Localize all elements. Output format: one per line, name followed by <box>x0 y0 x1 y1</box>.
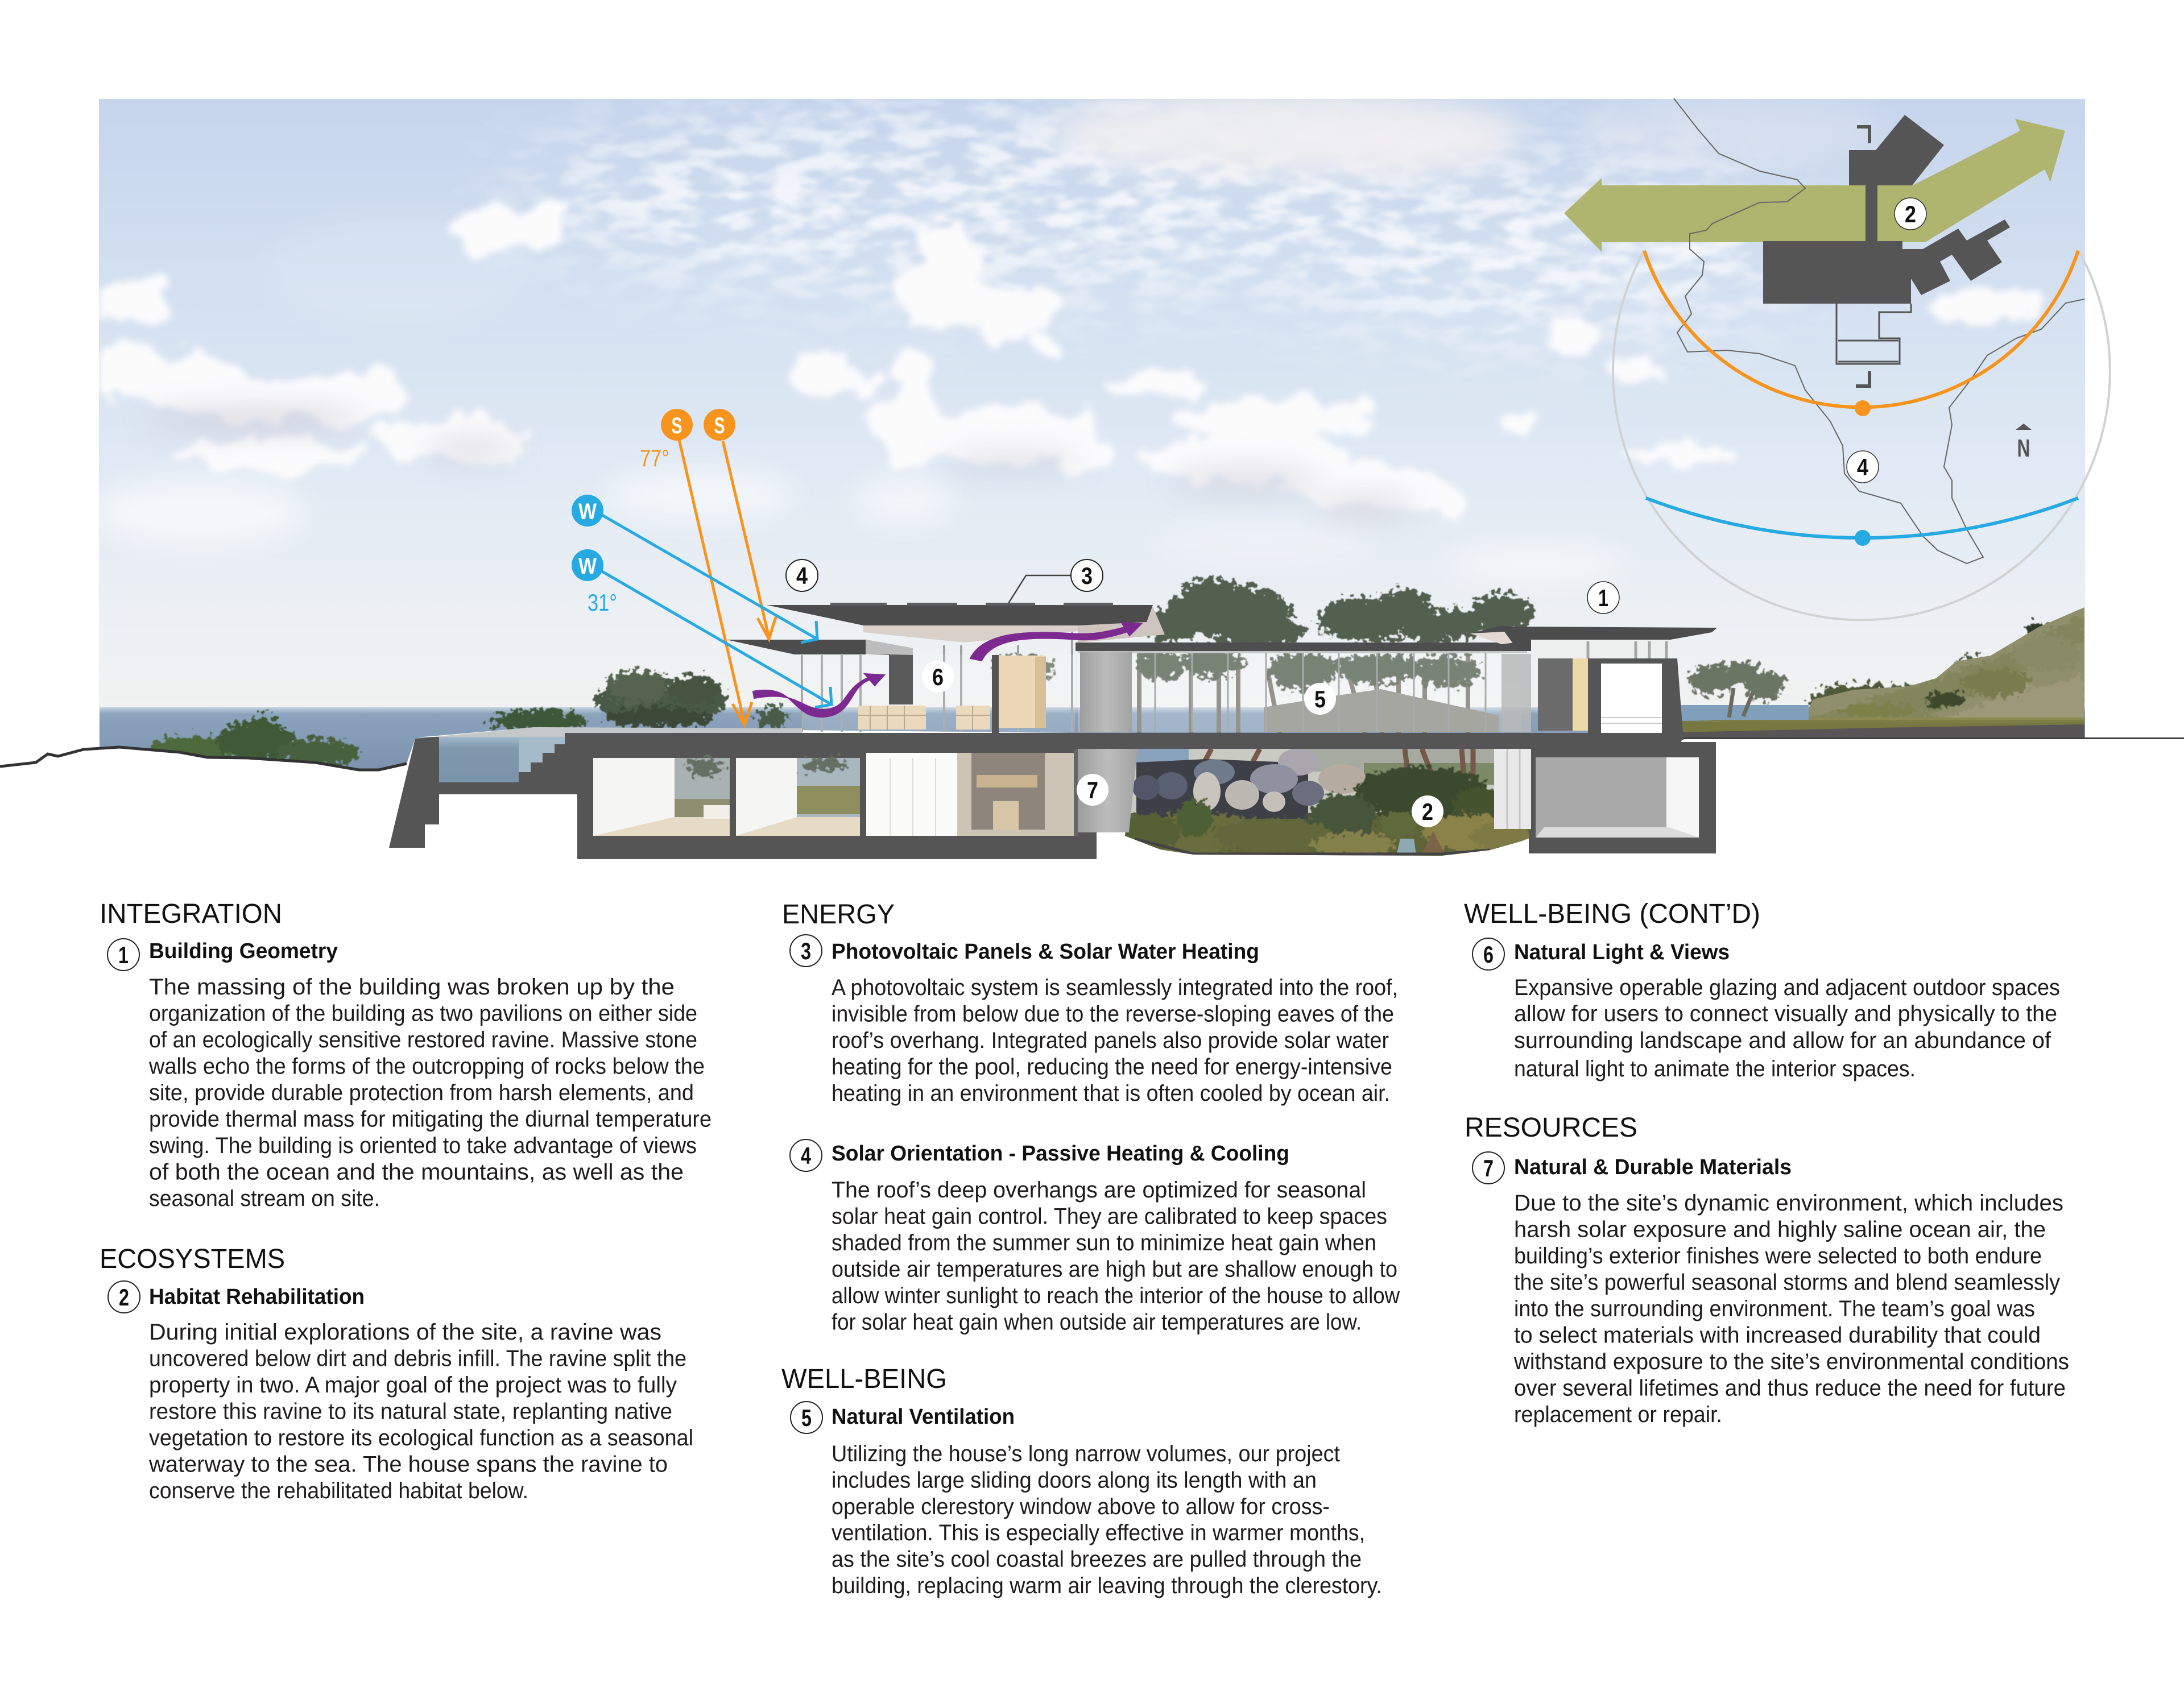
text block: natural light: Expansive operable glazing and adjacent outdoor spaces <box>1514 975 2060 1000</box>
text block: photovoltaic panels: invisible from below due to the reverse-sloping eaves of the <box>832 1002 1394 1027</box>
panel: main roof with photovoltaic panels <box>726 603 1531 654</box>
callout: marker 4 on section: 4 <box>796 562 808 589</box>
text block: photovoltaic panels: heating for the pool, reducing the need for energy-intensive <box>832 1054 1392 1079</box>
text block: habitat rehabilitation: property in two. A major goal of the project was to fully <box>149 1373 677 1398</box>
text block: natural and durable materials: over several lifetimes and thus reduce the need for future <box>1514 1376 2066 1401</box>
text block: habitat rehabilitation: restore this ravine to its natural state, replanting native <box>149 1399 672 1424</box>
pool outline <box>1836 304 1911 364</box>
heading: well-being continued: WELL-BEING (CONT’D) <box>1464 899 1760 929</box>
text block: building geometry: site, provide durable protection from harsh elements, and <box>149 1080 694 1105</box>
text block: solar orientation: allow winter sunlight to reach the interior of the house to allow <box>832 1283 1400 1308</box>
icon: winter sun marker W: W <box>578 499 597 524</box>
icon: summer sun marker S <box>704 409 735 441</box>
text block: habitat rehabilitation: During initial explorations of the site, a ravine was <box>149 1320 661 1345</box>
label: winter sun angle: 31° <box>588 589 617 616</box>
text block: natural and durable materials: harsh solar exposure and highly saline ocean air, the <box>1514 1217 2046 1242</box>
panel: right pavilion upper level <box>1470 626 1717 740</box>
icon: number 4: 4 <box>801 1142 811 1169</box>
text block: natural ventilation: building, replacing warm air leaving through the clerestory. <box>832 1573 1382 1598</box>
panel: right pavilion lower level <box>1529 733 1716 853</box>
text block: solar orientation: solar heat gain control. They are calibrated to keep spaces <box>832 1204 1387 1229</box>
icon: number 2: 2 <box>119 1284 129 1311</box>
panel: ocean band <box>100 707 2085 773</box>
summer sun path <box>1644 251 2078 416</box>
callout: leader line and marker 3: 3 <box>1081 562 1093 589</box>
text block: natural ventilation: Utilizing the house’s long narrow volumes, our project <box>832 1441 1340 1466</box>
green view arrow right <box>1877 119 2065 242</box>
callout: marker 1 on section: 1 <box>1598 585 1608 611</box>
text block: natural ventilation: includes large sliding doors along its length with an <box>832 1468 1317 1493</box>
panel: restored ravine with rocks and planting <box>1118 748 1536 859</box>
north arrow <box>2016 424 2032 462</box>
text block: natural and durable materials: the site’s powerful seasonal storms and blend seamlessly <box>1514 1270 2060 1295</box>
building footprint <box>1763 115 2010 304</box>
panel: pool and retaining wall <box>389 727 802 848</box>
text block: solar orientation: The roof’s deep overhangs are optimized for seasonal <box>832 1178 1366 1203</box>
text block: solar orientation <box>832 1178 1400 1335</box>
subheading: building geometry: Building Geometry <box>149 939 338 963</box>
text block: photovoltaic panels: heating in an environment that is often cooled by ocean air. <box>832 1081 1390 1106</box>
site boundary contour <box>1674 98 2084 563</box>
callout: marker 2 on section: 2 <box>1422 798 1433 825</box>
text block: natural ventilation: ventilation. This is especially effective in warmer months, <box>832 1520 1365 1545</box>
panel: ground below terrain line <box>0 727 2184 910</box>
icon: number 1 <box>107 939 139 971</box>
text block: natural light: surrounding landscape and allow for an abundance of <box>1514 1028 2051 1053</box>
callout: marker 7 on section <box>1077 774 1108 806</box>
text block: building geometry: of an ecologically sensitive restored ravine. Massive stone <box>149 1027 697 1052</box>
icon: number 3: 3 <box>801 938 811 964</box>
text block: building geometry: swing. The building is oriented to take advantage of views <box>149 1133 697 1158</box>
heading: ecosystems: ECOSYSTEMS <box>100 1244 285 1274</box>
icon: number 2 <box>108 1281 140 1313</box>
text block: natural and durable materials: into the surrounding environment. The team’s goal was <box>1514 1296 2035 1321</box>
callout: leader line and marker 3 <box>1008 559 1103 603</box>
text block: building geometry: seasonal stream on site. <box>149 1186 380 1211</box>
text column: well-being continued and resources <box>1464 899 2069 1427</box>
panel: sky background with clouds <box>91 94 2085 741</box>
subheading: natural and durable materials: Natural & Durable Materials <box>1514 1155 1792 1179</box>
subheading: solar orientation: Solar Orientation - Passive Heating & Cooling <box>832 1142 1289 1166</box>
marker 4 on plan <box>1847 451 1879 483</box>
text column: integration and ecosystems <box>100 899 712 1503</box>
text block: habitat rehabilitation <box>148 1320 693 1503</box>
text block: natural and durable materials <box>1513 1191 2069 1427</box>
subheading: habitat rehabilitation: Habitat Rehabilitation <box>149 1285 365 1309</box>
text column: energy and well-being <box>781 900 1400 1598</box>
callout: marker 4 on section <box>786 559 818 591</box>
marker 4 on plan: 4 <box>1857 454 1869 480</box>
text block: building geometry: organization of the building as two pavilions on either side <box>149 1001 697 1026</box>
panel: lower floor rooms <box>565 733 1586 859</box>
icon: number 6 <box>1472 938 1504 970</box>
subheading: natural light: Natural Light & Views <box>1514 940 1730 964</box>
callout: marker 5 on section: 5 <box>1314 686 1326 712</box>
icon: summer sun marker S <box>661 409 693 441</box>
arrow: winter sun rays <box>601 515 832 707</box>
icon: number 5 <box>791 1402 822 1433</box>
text block: photovoltaic panels: A photovoltaic system is seamlessly integrated into the roof, <box>832 975 1398 1000</box>
icon: summer sun marker S: S <box>714 413 725 438</box>
icon: number 7: 7 <box>1483 1155 1494 1182</box>
heading: energy: ENERGY <box>782 900 895 930</box>
text block: photovoltaic panels: roof’s overhang. Integrated panels also provide solar water <box>832 1028 1389 1053</box>
text block: building geometry: of both the ocean and the mountains, as well as the <box>149 1160 684 1185</box>
icon: winter sun marker W: W <box>578 554 597 579</box>
north arrow: N <box>2017 434 2030 462</box>
callout: marker 1 on section <box>1587 582 1619 614</box>
panel: background trees above the roofline <box>992 578 1533 733</box>
heading: well-being: WELL-BEING <box>781 1364 947 1394</box>
marker 2 on plan: 2 <box>1905 201 1916 227</box>
icon: cypress tree right of house <box>1689 662 1785 718</box>
section cut marks <box>1856 127 1869 386</box>
sun path circle <box>1613 251 2110 620</box>
callout: marker 6 on section: 6 <box>932 664 944 690</box>
winter sun path <box>1646 498 2078 546</box>
text block: natural light <box>1514 975 2060 1081</box>
text block: habitat rehabilitation: waterway to the sea. The house spans the ravine to <box>148 1452 668 1477</box>
panel: site plan with sun path diagram <box>1564 98 2110 620</box>
callout: marker 5 on section <box>1304 683 1336 715</box>
heading: resources: RESOURCES <box>1465 1113 1637 1143</box>
text block: natural light: allow for users to connect visually and physically to the <box>1514 1001 2057 1026</box>
text block: natural ventilation: as the site’s cool coastal breezes are pulled through the <box>832 1547 1362 1572</box>
icon: number 7 <box>1472 1152 1504 1184</box>
text block: building geometry: provide thermal mass for mitigating the diurnal temperature <box>149 1106 712 1131</box>
text block: natural and durable materials: building’s exterior finishes were selected to both endure <box>1514 1244 2042 1269</box>
panel: glazed living hall <box>1078 651 1531 732</box>
icon: number 6: 6 <box>1483 941 1494 968</box>
arrow: purple ventilation upper <box>970 623 1141 661</box>
text block: solar orientation: outside air temperatures are high but are shallow enough to <box>832 1257 1397 1282</box>
text block: natural and durable materials: withstand exposure to the site’s environmental conditions <box>1513 1349 2069 1374</box>
callout: marker 6 on section <box>922 661 954 693</box>
text block: natural ventilation <box>832 1441 1382 1598</box>
icon: number 1: 1 <box>118 942 129 968</box>
text block: habitat rehabilitation: vegetation to restore its ecological function as a seasonal <box>149 1425 693 1450</box>
subheading: natural ventilation: Natural Ventilation <box>832 1405 1015 1429</box>
text block: building geometry: walls echo the forms of the outcropping of rocks below the <box>148 1054 705 1079</box>
text block: solar orientation: for solar heat gain when outside air temperatures are low. <box>832 1310 1362 1335</box>
text block: habitat rehabilitation: uncovered below dirt and debris infill. The ravine split the <box>149 1346 686 1371</box>
icon: number 3 <box>790 935 822 967</box>
text block: natural light: natural light to animate the interior spaces. <box>1514 1056 1916 1081</box>
text block: natural ventilation: operable clerestory window above to allow for cross- <box>832 1494 1330 1519</box>
marker 2 on plan <box>1895 198 1926 230</box>
label: summer sun angle: 77° <box>640 445 669 471</box>
arrow: purple ventilation lower <box>753 674 884 717</box>
green view arrow left <box>1564 178 1866 252</box>
heading: integration: INTEGRATION <box>100 899 282 929</box>
panel: kitchen and upper left pavilion interior <box>802 628 1075 733</box>
text block: habitat rehabilitation: conserve the rehabilitated habitat below. <box>149 1478 528 1503</box>
subheading: photovoltaic panels: Photovoltaic Panels & Solar Water Heating <box>832 940 1259 964</box>
icon: winter sun marker W <box>572 549 603 581</box>
text block: natural and durable materials: replacement or repair. <box>1514 1402 1722 1427</box>
callout: marker 2 on section <box>1412 795 1443 827</box>
icon: coastal shrubs left of pool <box>148 670 789 769</box>
arrow: summer sun rays <box>679 440 776 725</box>
text block: building geometry <box>148 975 712 1211</box>
icon: number 4 <box>790 1139 822 1171</box>
icon: summer sun marker S: S <box>671 413 682 438</box>
callout: marker 7 on section: 7 <box>1087 777 1098 803</box>
panel: right hillside landscape <box>1672 603 2184 741</box>
text block: photovoltaic panels <box>832 975 1398 1106</box>
text block: natural and durable materials: Due to the site’s dynamic environment, which includes <box>1514 1191 2063 1216</box>
icon: winter sun marker W <box>572 495 603 527</box>
text block: solar orientation: shaded from the summer sun to minimize heat gain when <box>832 1230 1376 1255</box>
icon: number 5: 5 <box>801 1404 812 1431</box>
text block: natural and durable materials: to select materials with increased durability that could <box>1514 1323 2041 1348</box>
text block: building geometry: The massing of the building was broken up by the <box>149 975 675 1000</box>
